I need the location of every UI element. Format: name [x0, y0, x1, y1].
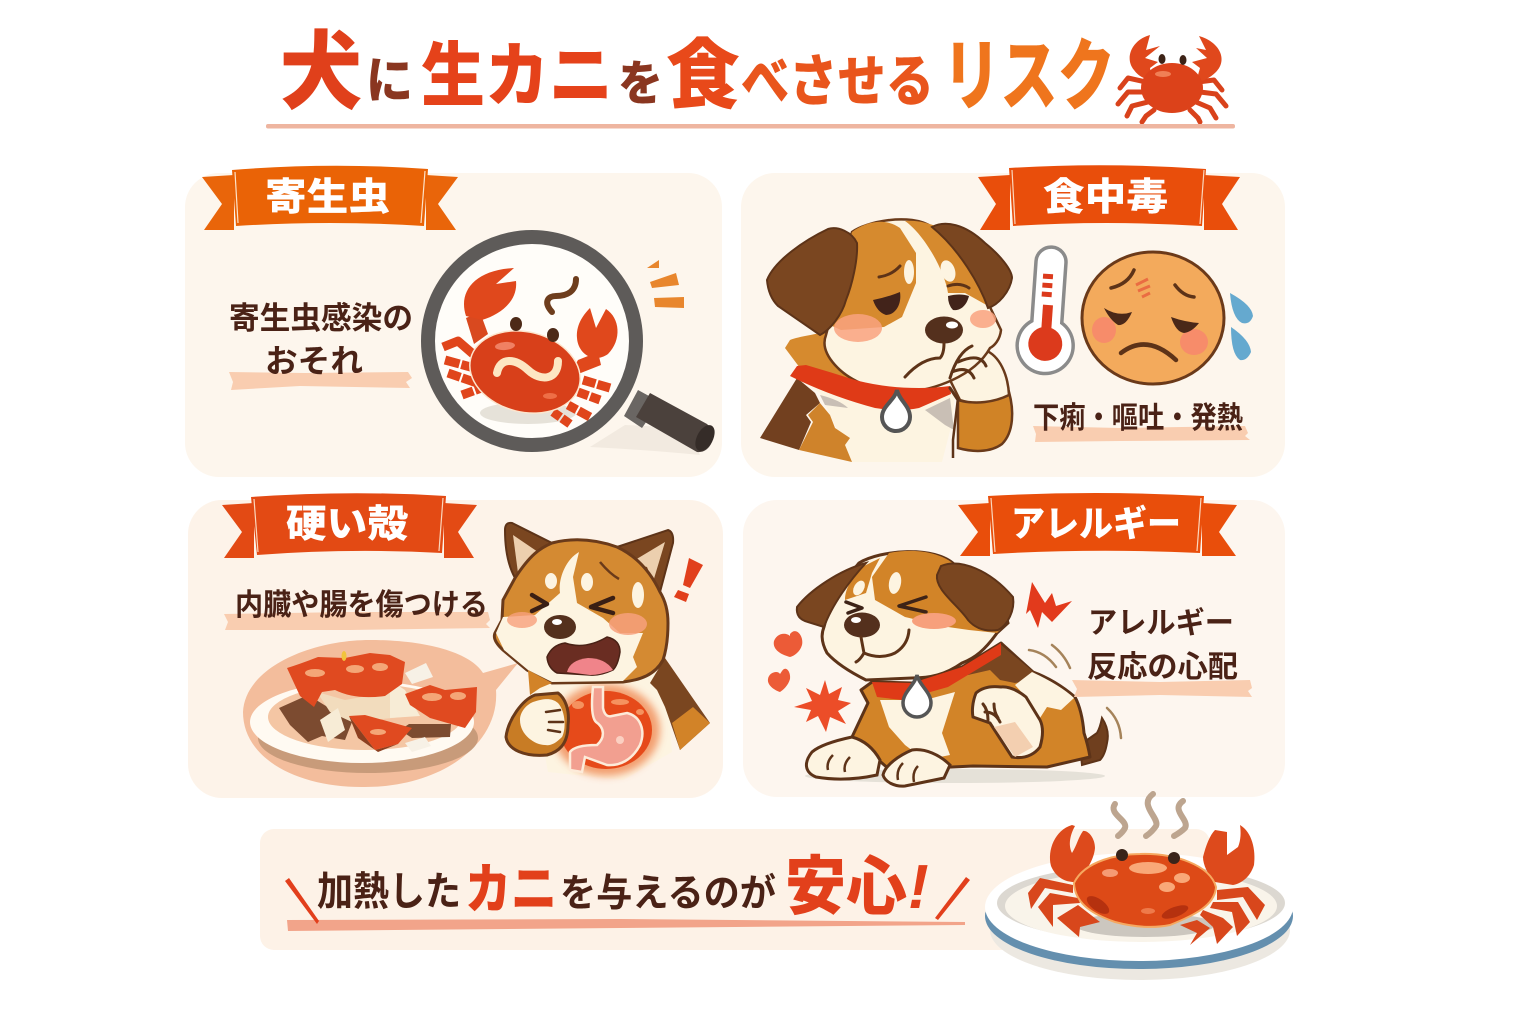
crab legs: [1028, 878, 1265, 945]
message text: カニ: [465, 860, 557, 920]
title: に: [366, 53, 413, 109]
motion lines: [1029, 645, 1121, 738]
tail: [1080, 718, 1108, 765]
neck patch: [528, 670, 552, 695]
message text: !: [908, 853, 929, 922]
icon: alert marks: [647, 260, 684, 308]
ribbon: 硬い殻: [222, 493, 477, 558]
text: 寄生虫感染のおそれ: おそれ: [265, 343, 363, 379]
ribbon: アレルギー: アレルギー: [1011, 503, 1181, 544]
ribbon: 寄生虫: [202, 166, 458, 230]
head: [494, 540, 668, 683]
banner: bottom message: [260, 829, 1210, 950]
message text: 安心: [785, 851, 907, 923]
message text: を与えるのが: [560, 873, 776, 915]
dog tag: [882, 390, 910, 431]
dog: scratching dog: [797, 551, 1108, 786]
panel: アレルギー: [743, 493, 1285, 797]
title: 犬: [280, 25, 362, 121]
icon: exclamation: [674, 558, 703, 602]
icon: thermometer: [1015, 245, 1080, 375]
head: [824, 219, 1001, 393]
text: 寄生虫感染のおそれ: 寄生虫感染の: [229, 301, 413, 336]
dog: sick dog: [760, 219, 1012, 462]
crab body: [1074, 854, 1216, 927]
title: 生カニ: [421, 37, 613, 115]
stomach: [552, 684, 660, 776]
icon: plate with cooked crab: [985, 794, 1293, 980]
icon: steam: [1114, 794, 1186, 836]
head: [822, 552, 1008, 680]
tag: [903, 675, 931, 717]
front paws: [806, 737, 880, 779]
paw: [506, 693, 568, 755]
ribbon: 食中毒: [978, 165, 1240, 230]
panel: 硬い殻: [188, 493, 723, 798]
ears back: [505, 523, 552, 578]
dog collar: [790, 365, 951, 410]
panel: 寄生虫: [185, 166, 722, 477]
ribbon: 硬い殻: 硬い殻: [286, 504, 408, 546]
message text: [317, 851, 929, 923]
title: [280, 25, 1115, 121]
ribbon: 食中毒: 食中毒: [1043, 177, 1168, 219]
icon: magnifier handle: [590, 390, 719, 455]
text: アレルギー反応の心配: アレルギー: [1088, 607, 1234, 640]
collar: [872, 643, 1001, 700]
body: [852, 643, 1090, 770]
dog: coughing dog: [494, 523, 710, 780]
title: べさせる: [741, 50, 934, 113]
chest: [528, 658, 672, 780]
icon: magnifying glass with crab: [428, 237, 636, 445]
title: 食: [666, 34, 740, 119]
ears: [797, 563, 866, 627]
callout: plate bubble: [243, 640, 518, 787]
icon: sad face: [1082, 252, 1224, 384]
dog paw: [950, 346, 986, 400]
underline swash: [287, 919, 965, 931]
icons: hearts and burst: [768, 582, 1072, 732]
text: 寄生虫感染のおそれ: [229, 301, 413, 390]
text: 下痢・嘔吐・発熱: 下痢・嘔吐・発熱: [1033, 402, 1243, 435]
ribbon: アレルギー: [958, 493, 1237, 556]
title: リスク: [943, 32, 1115, 120]
scratching leg: [972, 687, 1042, 758]
crab claws: [1050, 825, 1095, 882]
back: [650, 658, 710, 750]
crab shell pieces: [279, 651, 477, 752]
panel: 食中毒: [741, 165, 1285, 477]
text: アレルギー反応の心配: [1072, 607, 1252, 697]
title: を: [618, 58, 663, 111]
ribbon: 寄生虫: 寄生虫: [265, 177, 390, 219]
icon: sweat drops: [1230, 293, 1253, 360]
message text: 加熱した: [317, 870, 461, 914]
neck: [785, 330, 880, 385]
title underline: [266, 124, 1235, 128]
text: アレルギー反応の心配: 反応の心配: [1087, 651, 1238, 684]
text: 内臓や腸を傷つける: 内臓や腸を傷つける: [235, 589, 488, 622]
face: [846, 597, 926, 613]
icon: title crab: [1118, 35, 1226, 122]
ears: [767, 228, 857, 335]
accent strokes: [285, 877, 970, 924]
